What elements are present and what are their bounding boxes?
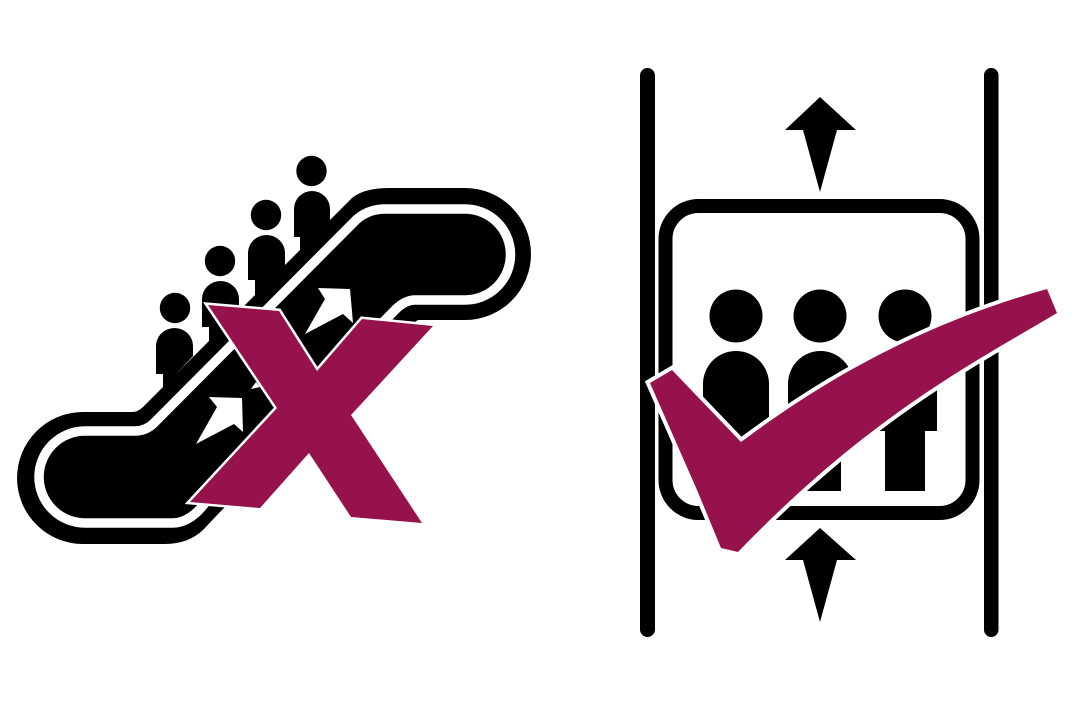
icon: elevator person 1	[703, 290, 769, 491]
panel: elevator with check mark	[640, 68, 1057, 637]
icon: right shaft wall	[984, 68, 998, 637]
icon: person 4 on escalator	[294, 156, 330, 250]
icon: elevator person 2	[788, 290, 853, 491]
panel: escalator with X	[17, 156, 531, 544]
icon: person 1 on escalator	[156, 293, 193, 388]
icon: person 3 on escalator	[248, 200, 285, 297]
icon: maroon check mark	[650, 289, 1057, 552]
icon: lower direction arrow	[196, 397, 243, 444]
icon: middle direction arrow fragment	[251, 382, 260, 389]
icon: escalator body	[17, 188, 531, 544]
icon: elevator cabin	[666, 206, 972, 513]
icon: person 2 on escalator	[202, 246, 239, 342]
icon: elevator person 3	[872, 290, 937, 491]
arrow: down-side up arrow	[785, 528, 856, 622]
icon: maroon X mark	[190, 305, 433, 523]
icon: upper direction arrow	[305, 288, 353, 334]
arrow: up	[785, 97, 856, 192]
icon: left shaft wall	[640, 68, 655, 637]
